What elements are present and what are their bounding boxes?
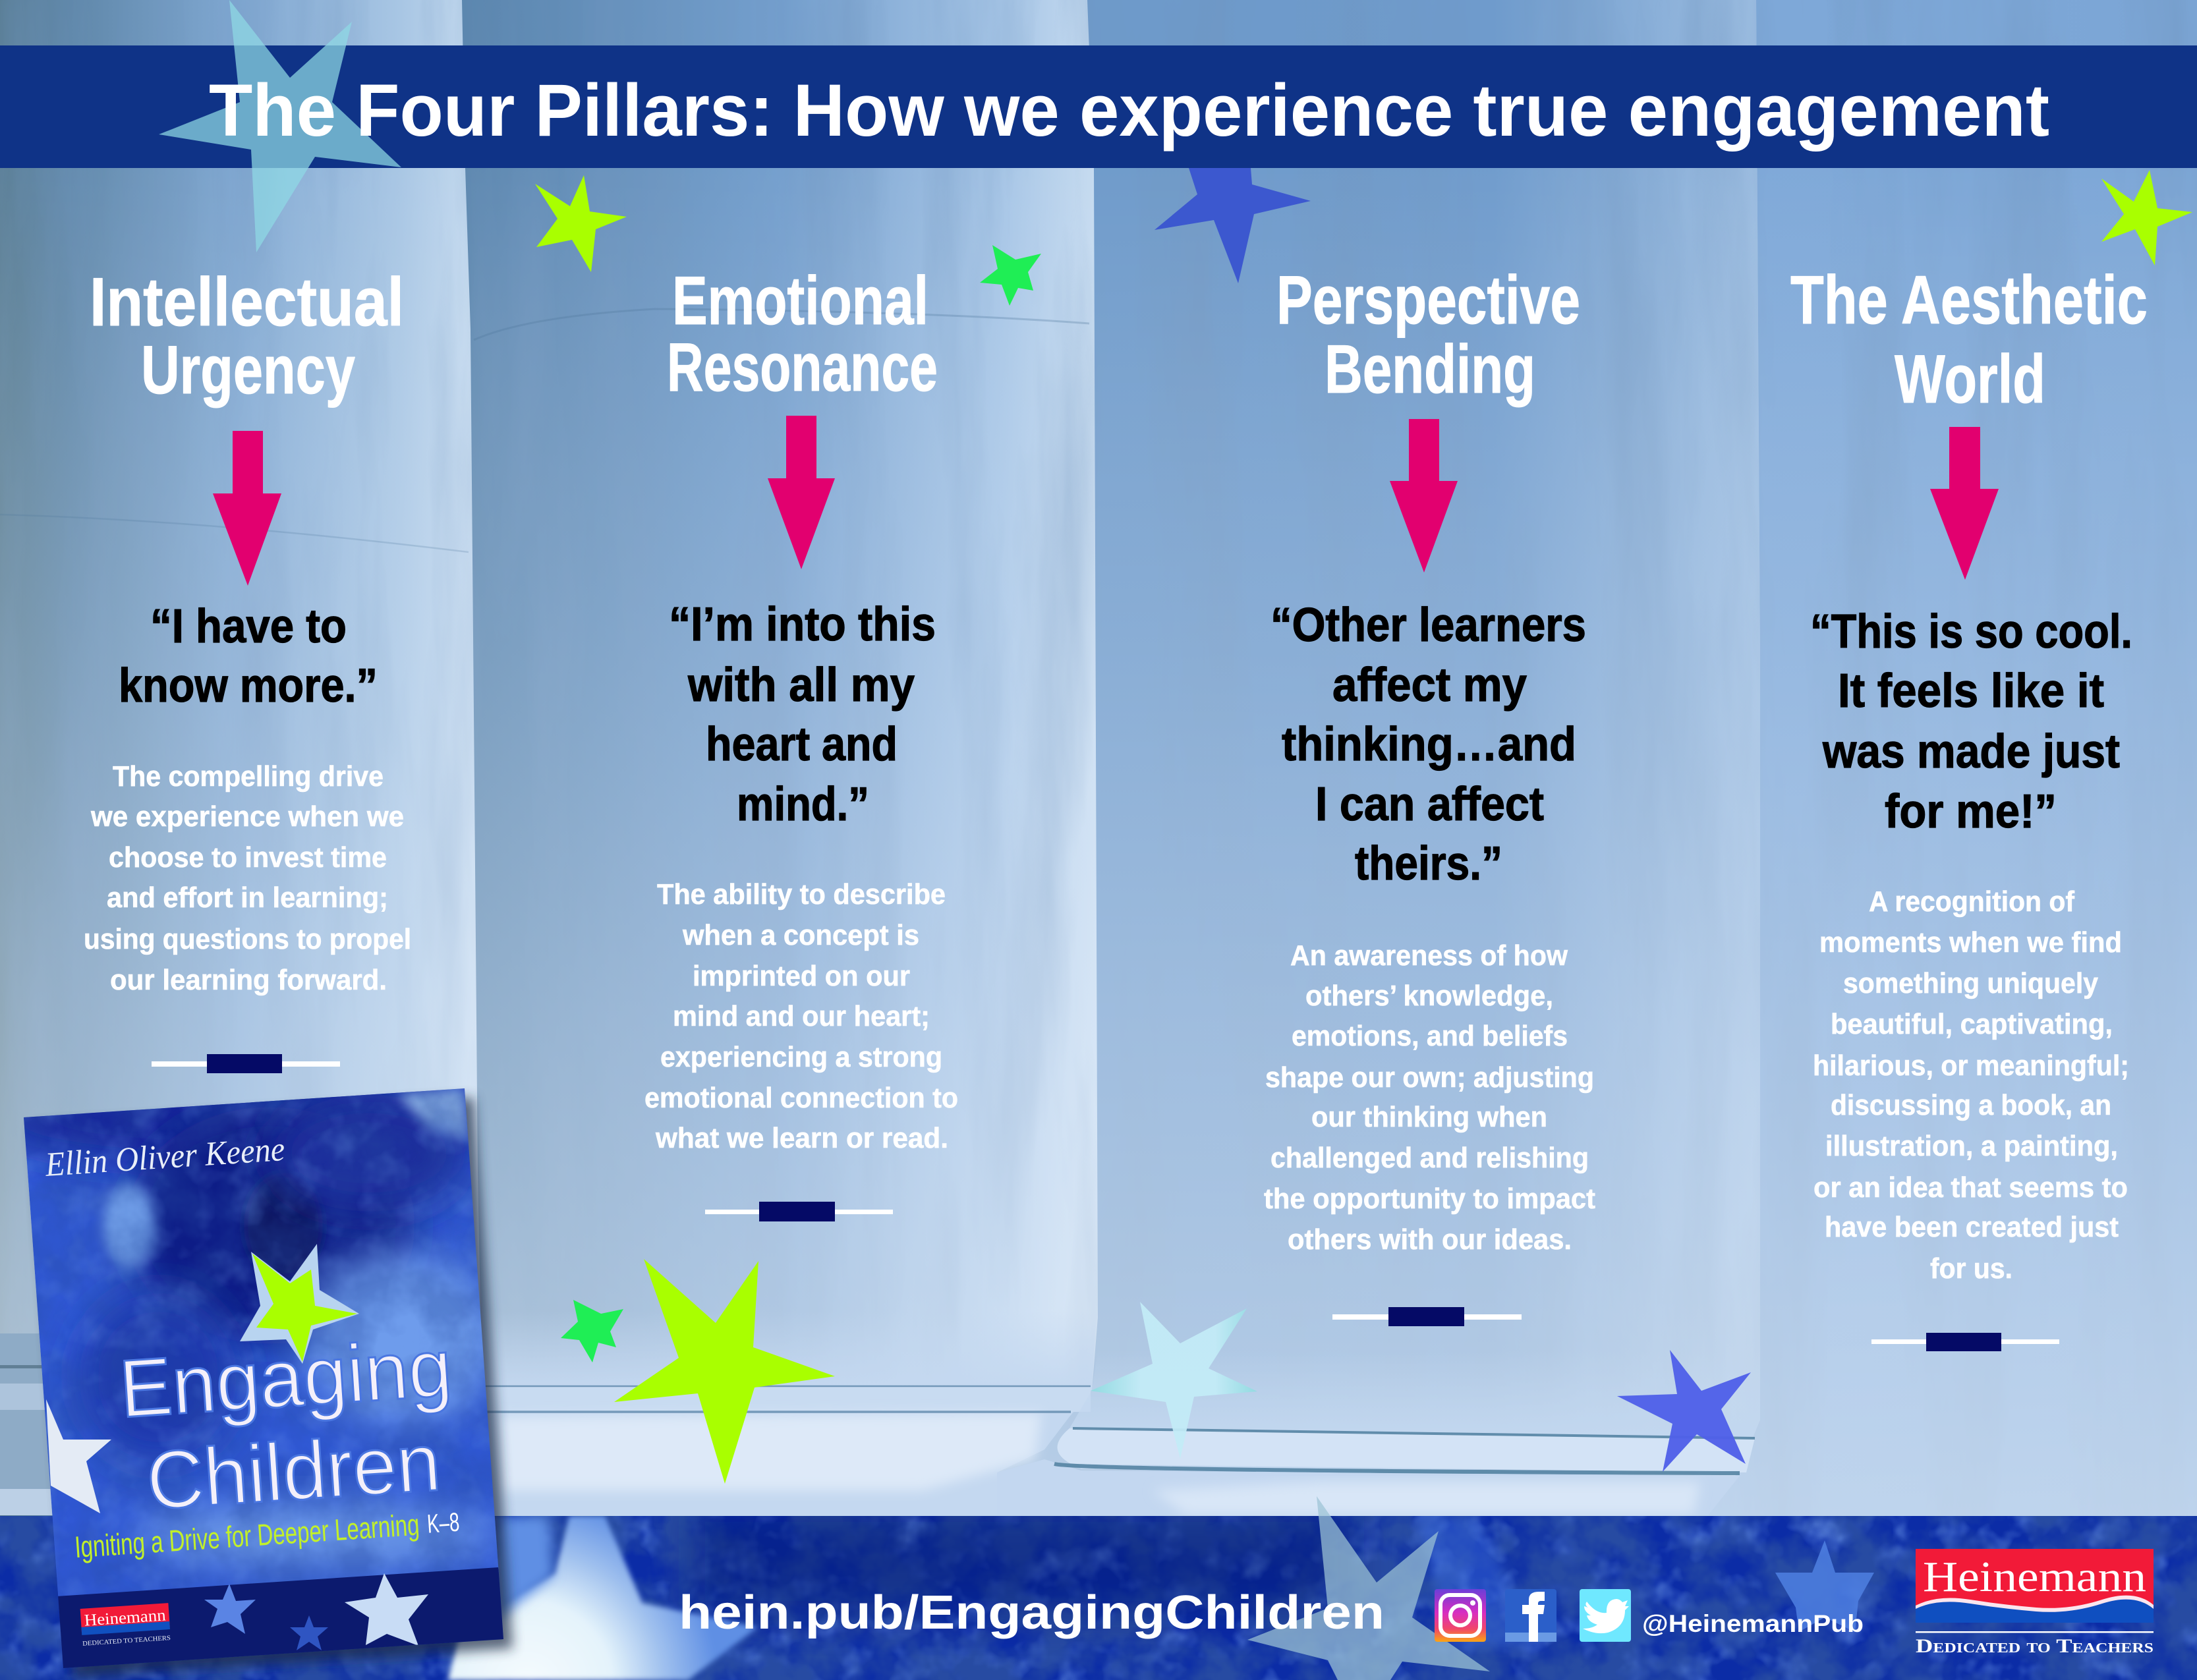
star: translucent pale top left: [159, 0, 401, 252]
description: have been created just: [1825, 1211, 2119, 1243]
small Heinemann logo: [80, 1603, 171, 1648]
book texts: K–8: [426, 1508, 461, 1539]
description: others with our ideas.: [1288, 1223, 1572, 1256]
panel: Intellectual Urgency: [84, 264, 411, 1073]
logo: Heinemann: Dedicated to Teachers: [1916, 1635, 2154, 1657]
title: The Four Pillars: How we experience true engagement: [209, 69, 2049, 152]
heading: The Aesthetic World: [1790, 262, 2148, 418]
description: challenged and relishing: [1270, 1142, 1589, 1174]
description: the opportunity to impact: [1264, 1183, 1595, 1215]
heading: Intellectual Urgency: Intellectual: [90, 264, 404, 341]
description: using questions to propel: [84, 923, 411, 955]
column base: stone steps: [0, 1311, 1760, 1515]
star: blue behind title band: [1155, 168, 1311, 283]
star: large lime: [614, 1259, 835, 1484]
star: grey-blue translucent footer star: [1247, 1496, 1490, 1680]
small Heinemann logo: Heinemann: [84, 1606, 167, 1630]
icon: facebook: [1505, 1589, 1556, 1642]
quote: “This is so cool.: [1810, 605, 2132, 658]
panel: The Aesthetic World: [1790, 262, 2148, 1351]
star: pale cyan: [1091, 1302, 1257, 1459]
panel: Emotional Resonance: [644, 263, 958, 1221]
description: A recognition of: [1869, 885, 2074, 918]
book texts: [43, 1121, 469, 1648]
description: illustration, a painting,: [1825, 1130, 2118, 1162]
arrow: [213, 431, 281, 586]
heading: Emotional Resonance: [667, 263, 938, 406]
quote: [119, 600, 378, 712]
logo: Heinemann: Heinemann: [1923, 1553, 2146, 1601]
heading: Perspective Bending: [1276, 262, 1580, 408]
book texts: Ellin Oliver Keene: [43, 1131, 286, 1184]
heading: Emotional Resonance: Emotional: [672, 263, 928, 339]
divider: [152, 1054, 340, 1073]
quote: “I’m into this: [669, 598, 936, 651]
star: small green lower: [561, 1300, 623, 1362]
star: blue footer star: [1775, 1540, 1874, 1632]
star: light: [345, 1573, 428, 1646]
description: or an idea that seems to: [1813, 1171, 2128, 1204]
quote: “I have to: [150, 600, 347, 653]
soft light patch behind icons: [1417, 1516, 1542, 1647]
quote: mind.”: [737, 778, 869, 831]
description: for us.: [1930, 1252, 2012, 1285]
heading: The Aesthetic World: World: [1895, 341, 2045, 418]
star: lime upper column 2: [535, 175, 627, 272]
quote: was made just: [1822, 725, 2120, 778]
book texts: Children: [144, 1416, 443, 1527]
quote: [1810, 605, 2132, 838]
small Heinemann logo: DEDICATED TO TEACHERS: [82, 1635, 171, 1648]
description: [1264, 939, 1595, 1256]
arrow: [1930, 427, 1999, 580]
quote: know more.”: [119, 659, 378, 712]
divider: [1332, 1307, 1522, 1326]
description: experiencing a strong: [660, 1041, 942, 1073]
icon: twitter: [1580, 1589, 1631, 1642]
quote: theirs.”: [1355, 837, 1502, 890]
description: what we learn or read.: [655, 1122, 948, 1154]
heading: Perspective Bending: Bending: [1325, 331, 1535, 408]
footer band: [0, 1496, 2197, 1680]
divider: [1871, 1333, 2059, 1351]
description: we experience when we: [90, 800, 404, 833]
heading: Perspective Bending: Perspective: [1276, 262, 1580, 339]
heading: Emotional Resonance: Resonance: [667, 329, 938, 406]
book cover: [0, 1074, 507, 1673]
bottom strip: [57, 1567, 507, 1673]
description: beautiful, captivating,: [1831, 1008, 2113, 1040]
quote: thinking…and: [1282, 718, 1576, 771]
divider: [705, 1202, 893, 1221]
description: [1813, 885, 2129, 1285]
website url: hein.pub/EngagingChildren: [679, 1586, 1384, 1639]
description: [84, 760, 411, 996]
star: cover lime with halo: [240, 1244, 359, 1364]
social handle: @HeinemannPub: [1642, 1610, 1864, 1637]
quote: “Other learners: [1270, 599, 1586, 652]
description: choose to invest time: [109, 841, 387, 874]
description: The compelling drive: [113, 760, 384, 793]
description: emotional connection to: [644, 1082, 958, 1114]
book texts: Engaging: [117, 1322, 455, 1435]
book texts: Igniting a Drive for Deeper Learning: [74, 1507, 420, 1564]
book shadow: [33, 1098, 513, 1677]
panel: Perspective Bending: [1264, 262, 1595, 1326]
description: [644, 878, 958, 1154]
description: moments when we find: [1819, 926, 2122, 959]
description: when a concept is: [682, 919, 919, 951]
description: emotions, and beliefs: [1292, 1020, 1568, 1052]
description: others’ knowledge,: [1305, 980, 1553, 1012]
description: mind and our heart;: [673, 1000, 930, 1032]
quote: [1270, 599, 1586, 890]
description: and effort in learning;: [107, 882, 388, 914]
star: blue small: [290, 1615, 328, 1650]
logo: Heinemann: [1916, 1549, 2154, 1657]
quote: for me!”: [1885, 785, 2057, 838]
quote: heart and: [706, 718, 898, 771]
heading: Intellectual Urgency: Urgency: [141, 332, 355, 408]
title band: [0, 45, 2197, 168]
icon: instagram: [1435, 1589, 1486, 1642]
star: periwinkle: [1617, 1350, 1751, 1472]
quote: affect my: [1332, 659, 1527, 712]
description: The ability to describe: [657, 878, 946, 910]
star: blue medium: [204, 1584, 256, 1634]
arrow: [768, 416, 835, 569]
description: our learning forward.: [110, 964, 387, 996]
quote: I can affect: [1315, 778, 1544, 831]
description: discussing a book, an: [1831, 1089, 2111, 1121]
arrow: [1390, 419, 1458, 573]
heading: Intellectual Urgency: [90, 264, 404, 408]
description: something uniquely: [1843, 967, 2098, 999]
quote: with all my: [687, 659, 915, 712]
star: lime top right: [2101, 170, 2192, 266]
quote: [669, 598, 936, 831]
quote: It feels like it: [1838, 665, 2104, 717]
star: white at left edge: [46, 1399, 111, 1513]
description: shape our own; adjusting: [1265, 1061, 1594, 1094]
star: green upper column 2: [980, 245, 1041, 306]
description: our thinking when: [1311, 1101, 1547, 1133]
description: imprinted on our: [693, 960, 910, 992]
description: An awareness of how: [1290, 939, 1568, 972]
description: hilarious, or meaningful;: [1813, 1050, 2129, 1082]
star: big white painted star in footer: [448, 1516, 758, 1680]
